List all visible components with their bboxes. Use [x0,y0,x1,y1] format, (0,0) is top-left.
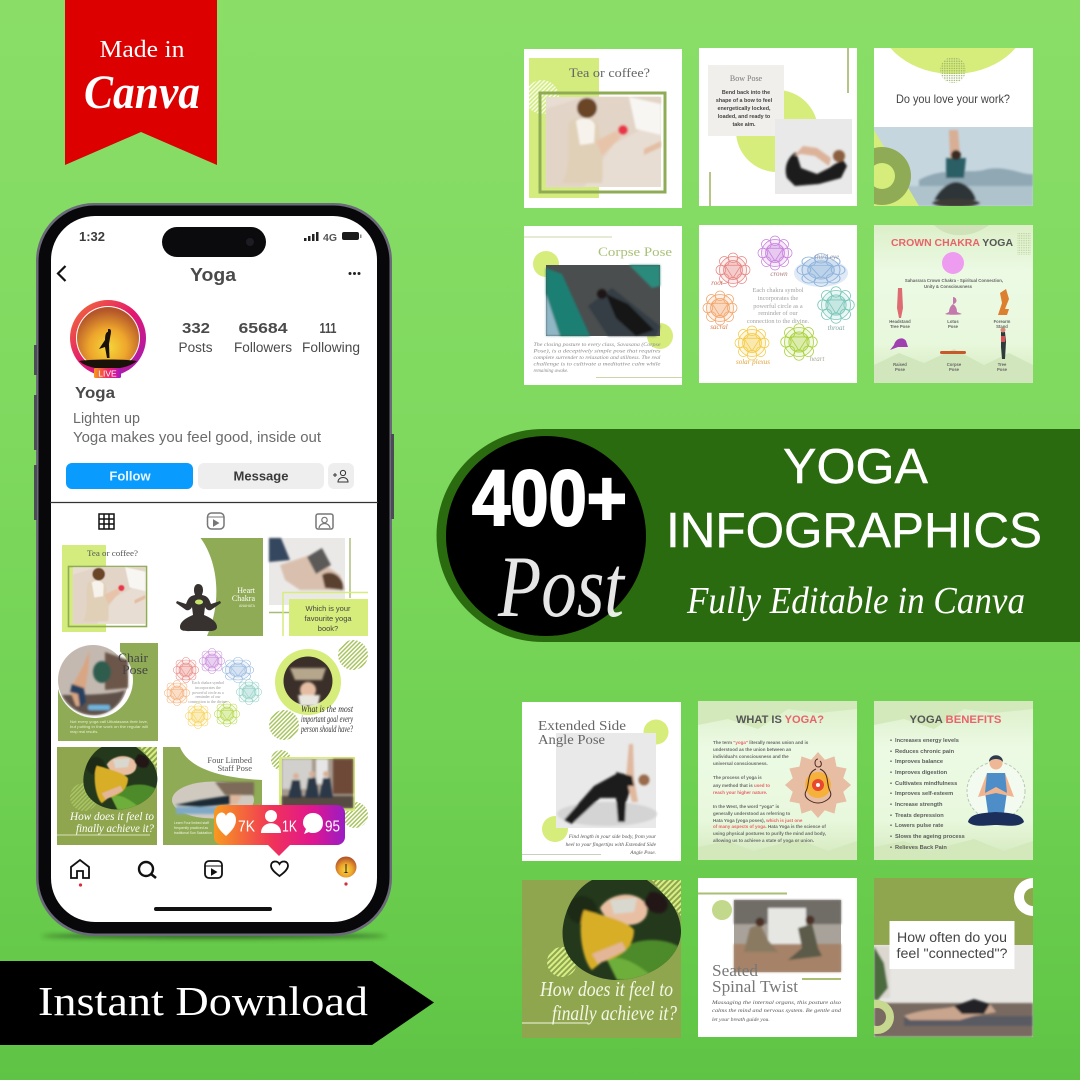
body text: understood as the union between an [713,747,792,752]
body text: connection to the divine. [747,318,810,325]
labels: root [711,279,724,287]
labels: sacral [710,323,728,331]
caption: let your breath guide you. [712,1017,770,1023]
body text: The process of yoga is [713,775,762,780]
question: Do you love your work? [896,92,1010,106]
caption [711,1000,841,1023]
body text: The closing posture to every class, Savasana (Corpse [534,343,661,348]
feed mini post: four limbed staff pose: traditional Sun Salutation [174,831,212,835]
feed mini post: four limbed staff pose: Four Limbed [207,755,253,765]
benefits list: • [890,845,892,851]
caption: Find length in your side body, from your [568,833,657,840]
feed mini post: four limbed staff pose [163,747,262,845]
profile stats: 332 [182,320,210,337]
instant download arrow [0,961,434,1045]
benefits list: • [890,781,892,787]
heading: YOGA [783,440,928,494]
notification bubble: 1K [282,818,298,836]
benefits list: Improves self-esteem [895,791,953,797]
instant download arrow: Instant Download [38,978,368,1024]
body text: universal consciousness. [713,761,768,766]
tile: extended side angle pose [522,702,681,861]
bio: Yoga [75,385,115,402]
title [538,718,626,747]
feed mini post: heart chakra: Heart [237,586,256,595]
pose labels: Pose [949,367,960,372]
profile buttons: Follow [109,468,151,484]
pose figures [890,288,1009,359]
body text: remaining awake. [534,369,568,374]
benefits list: • [890,759,892,765]
caption [566,833,657,856]
banner [437,429,1080,642]
feed mini post: tea or coffee: Tea or coffee? [87,548,138,558]
body text: reach your higher nature. [713,790,767,795]
feed mini post: heart chakra: ANAHATA [239,604,256,608]
feed mini post: tea or coffee [62,545,146,632]
phone shadow [42,934,386,938]
body text: Bend back into the [722,90,770,96]
labels: throat [828,324,845,332]
pose labels: Lotus [947,319,959,324]
feed mini post: four limbed staff pose: frequently practiced as [174,826,208,830]
benefits list: • [890,813,892,819]
title: Seated [712,961,759,980]
benefits list: • [890,749,892,755]
title: YOGA BENEFITS [910,714,1002,726]
phone mockup [34,203,394,938]
profile buttons: Message [234,468,288,484]
pose labels [889,319,1011,372]
feed mini post: most important goal: What is the most [301,704,353,714]
status bar: 4G [323,233,337,244]
black badge circle [446,436,646,636]
tile: seated spinal twist [698,878,857,1037]
feed mini post: chair pose: but putting in the work on the regular will [70,725,148,729]
meditating figure [967,755,1025,826]
feed mini post: most important goal: person should have? [300,724,353,734]
body text: The term "yoga" literally means union and is [713,740,809,745]
tile: how often connected [874,878,1033,1037]
body text: complete surrender to relaxation and stillness. The real [534,356,661,361]
body text [716,90,773,128]
pose labels: Corpse [947,362,962,367]
feed mini post: chair pose: Pose [122,662,148,677]
avatar with live badge [70,300,146,378]
feed mini post: most important goal: important goal every [301,714,353,724]
notification bubble [214,805,345,856]
profile stats: Following [302,340,360,355]
body text: challenge is to cultivate a meditative calm while [534,362,662,368]
tile: yoga benefits [874,701,1033,860]
tile: crown chakra yoga [874,225,1033,383]
feed mini post: how does it feel [57,747,164,845]
feed mini post: favourite yoga book: Which is your [305,604,351,613]
heading: INFOGRAPHICS [666,504,1042,558]
benefits list: Reduces chronic pain [895,749,955,755]
avatar with live badge: LIVE [98,368,117,378]
tile: chakra symbols [699,225,857,383]
body text: shape of a bow to feel [716,98,773,104]
profile stats: Followers [234,340,292,355]
pose labels: Headstand [889,319,911,324]
labels: third eye [815,253,839,261]
labels: heart [810,355,825,363]
profile header [58,265,360,285]
body text: take aim. [732,122,756,128]
question card [890,921,1014,969]
feed mini post: four limbed staff pose: Staff Pose [217,763,252,773]
pose labels: Forearm [994,319,1011,324]
top tile: tea or coffee [524,49,682,208]
caption: Unity & Consciousness [924,284,973,289]
benefits list: • [890,823,892,829]
top tile: do you love your work [874,48,1033,206]
body text: any method that is used to [713,783,770,788]
body text: generally understood as referring to [713,811,791,816]
caption: heel to your fingertips with Extended Side [566,841,657,848]
bio: Lighten up [73,411,140,427]
benefits list: • [890,738,892,744]
profile stats: Posts [178,340,213,355]
benefits list: • [890,770,892,776]
feed mini post: chair pose: Not every yoga call Utkatasana their love, [70,720,148,724]
pose labels: Stand [996,324,1008,329]
heading [666,440,1042,558]
benefits list: Increase strength [895,802,943,808]
pose labels: Pose [948,324,959,329]
profile buttons [66,463,354,489]
caption: Massaging the internal organs, this posture also [711,1000,841,1006]
tile: what is yoga [698,701,857,860]
benefits list: Relieves Back Pain [895,845,947,851]
feed mini post: chair pose: reap real results. [70,730,98,734]
feed mini post: favourite yoga book [269,538,368,636]
tile: how does it feel [522,880,681,1038]
benefits list [890,738,965,851]
notification bubble: 7K [238,818,256,836]
notification bubble: 95 [325,818,340,836]
benefits list: Improves digestion [895,770,948,776]
body text: reminder of our [758,310,799,317]
benefits list: • [890,834,892,840]
question text: feel "connected"? [896,946,1008,961]
title [712,961,798,996]
bio [73,385,321,446]
pose labels: Raised [893,362,907,367]
benefits list: Cultivates mindfulness [895,781,957,787]
status bar [79,227,362,257]
body text: incorporates the [758,295,798,302]
feed mini post: group yoga photo [271,750,368,828]
benefits list: Lowers pulse rate [895,823,943,829]
feed mini post: favourite yoga book: book? [318,624,338,633]
profile stats: 111 [320,320,336,337]
labels: solar plexus [736,358,770,366]
ribbon: made in canva [65,0,217,165]
title: Bow Pose [730,74,763,83]
feed mini post: heart chakra: Chakra [232,594,255,603]
profile stats: 65684 [238,320,288,337]
benefits list: Treats depression [895,813,944,819]
bio: Yoga makes you feel good, inside out [73,430,321,446]
feed mini post: chakra symbols: incorporates the [195,685,221,690]
status bar: 1:32 [79,230,105,244]
lotus icon [785,752,851,818]
benefits list: • [890,791,892,797]
profile stats [178,320,360,355]
body text: loaded, and ready to [718,114,771,120]
feed mini post: heart chakra [176,538,263,636]
caption: Sahasrara Crown Chakra - Spiritual Connection, [905,278,1003,283]
benefits list: • [890,802,892,808]
body text: individual's consciousness and the [713,754,789,759]
body text [532,343,662,374]
feed mini post: chakra symbols: Each chakra symbol [192,680,225,685]
benefits list: Increases energy levels [895,738,959,744]
title: Angle Pose [538,732,605,747]
labels [710,253,845,366]
title: Corpse Pose [598,244,672,259]
benefits list: Improves balance [895,759,943,765]
labels: crown [770,270,788,278]
feed mini post: chakra symbols [164,648,262,729]
title: Spinal Twist [712,977,798,996]
body text: of many aspects of yoga. Hata Yoga is the science of [713,824,826,829]
profile tabs [50,502,378,529]
body text [713,740,826,843]
feed mini post: how does it feel: finally achieve it? [76,821,154,835]
bottom navigation [71,856,356,911]
feed mini post: most important goal [269,640,368,740]
feed mini post: chair pose [57,642,158,741]
body text: energetically locked, [717,106,771,112]
caption: Angle Pose. [629,850,656,856]
tile: corpse pose [524,226,682,385]
title: CROWN CHAKRA YOGA [891,237,1013,249]
top tile: bow pose [699,48,857,206]
caption [905,278,1003,289]
pose labels: Pose [997,367,1008,372]
body text: In the West, the word "yoga" is [713,804,780,809]
feed mini post: chair pose: Chair [118,650,149,665]
feed mini post: chakra symbols: connection to the divine. [188,699,228,704]
badge: post: Post [497,539,626,636]
question text: How often do you [897,930,1007,945]
body text: allowing us to achieve a state of yoga or union. [713,838,814,843]
icon: crown chakra [942,252,964,274]
body text: Hata Yoga (yoga poses), which is just one [713,818,803,823]
benefits list: Slows the ageing process [895,834,965,840]
body text: using physical postures to purify the mind and body, [713,831,826,836]
badge: 400+: 400+ [472,453,627,542]
question text [896,930,1008,961]
body text: Each chakra symbol [752,287,804,294]
ribbon: made in canva: Made in [100,37,184,63]
title: Extended Side [538,718,626,733]
feed mini post: how does it feel: How does it feel to [69,809,154,823]
feed mini post: four limbed staff pose: Learn Four limbed staff [174,821,209,825]
pose labels: Tree Pose [890,324,911,329]
title: WHAT IS YOGA? [736,714,824,726]
profile header: Yoga [190,265,237,285]
body text: Pose), is a deceptively simple pose that requires [532,350,661,354]
body text: powerful circle as a [753,303,803,310]
feed mini post: chakra symbols: powerful circle as a [192,690,224,695]
body text [747,287,810,325]
subheading: Fully Editable in Canva [686,580,1025,622]
feed mini post: favourite yoga book: favourite yoga [304,614,352,623]
caption: calms the mind and nervous system. Be gentle and [712,1008,841,1014]
ribbon: made in canva: Canva [84,66,200,119]
title: Tea or coffee? [569,65,650,80]
feed mini post: chakra symbols: reminder of our [195,694,221,699]
pose labels: Tree [998,362,1007,367]
pose labels: Pose [895,367,906,372]
